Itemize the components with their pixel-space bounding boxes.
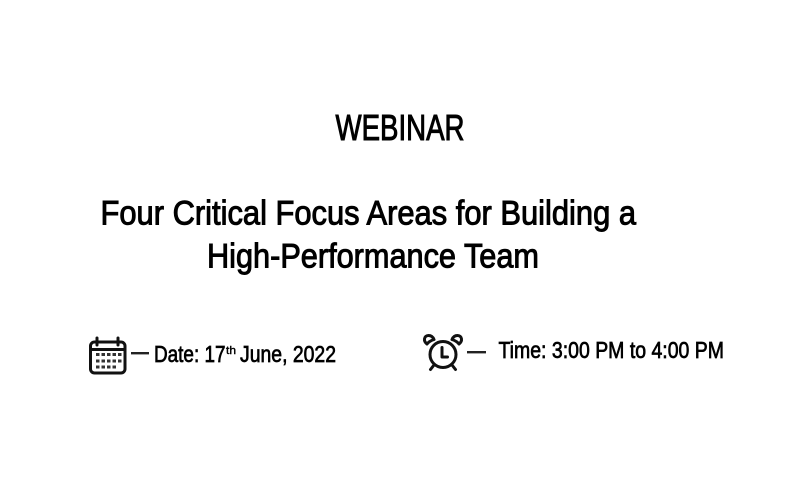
date text: June, 2022 <box>240 341 336 367</box>
title: High-Performance Team <box>207 238 539 276</box>
icon: calendar <box>90 338 125 373</box>
date text: Date: 17 <box>154 341 226 367</box>
icon: alarm clock <box>424 336 462 370</box>
heading: webinar: WEBINAR <box>336 107 464 148</box>
dash: date <box>131 352 149 354</box>
time text: Time: 3:00 PM to 4:00 PM <box>498 337 724 363</box>
dash: time <box>467 351 486 353</box>
title: Four Critical Focus Areas for Building a <box>100 194 637 232</box>
title <box>100 194 637 276</box>
date text: th <box>226 345 236 357</box>
date text <box>154 341 336 367</box>
